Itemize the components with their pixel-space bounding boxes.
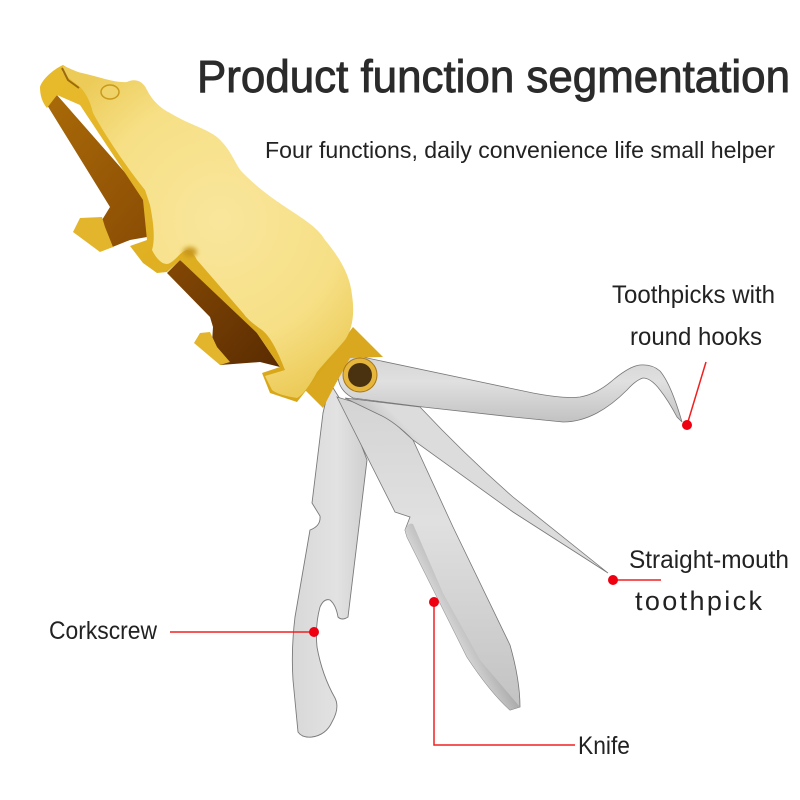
callout: toothpicks with round hooks: [612, 281, 775, 430]
shoulder highlight: [183, 247, 197, 257]
callout: toothpicks with round hooks: round hooks: [630, 323, 762, 351]
title: Product function segmentation: [197, 51, 790, 102]
eye: [101, 85, 119, 99]
knife blade: [337, 397, 520, 710]
pivot rivet: [343, 358, 377, 392]
hook toothpick blade: [338, 355, 682, 422]
callout: toothpicks with round hooks: Toothpicks with: [612, 281, 775, 309]
callout: knife: Knife: [578, 732, 630, 760]
callout: corkscrew: Corkscrew: [49, 617, 158, 645]
callout: knife: [429, 597, 630, 760]
body plate: [62, 66, 353, 398]
icon: gold mouse body: [40, 65, 383, 408]
front foot: [73, 217, 113, 252]
knife bevel: [405, 524, 520, 710]
callout: straight-mouth toothpick: Straight-mouth: [629, 546, 789, 574]
subtitle: Four functions, daily convenience life small helper: [265, 137, 775, 163]
callout: corkscrew: [49, 617, 319, 645]
rear foot: [194, 332, 230, 365]
mouth shadow: [62, 68, 79, 88]
callout: straight-mouth toothpick: [608, 546, 789, 616]
corkscrew blade: [292, 383, 367, 737]
dark underside slots: [47, 95, 280, 367]
rear tab: [305, 327, 383, 408]
callout: straight-mouth toothpick: toothpick: [635, 586, 762, 616]
icon: steel multitool blades: [292, 355, 682, 737]
straight toothpick blade: [345, 398, 608, 573]
rim: [40, 65, 350, 402]
